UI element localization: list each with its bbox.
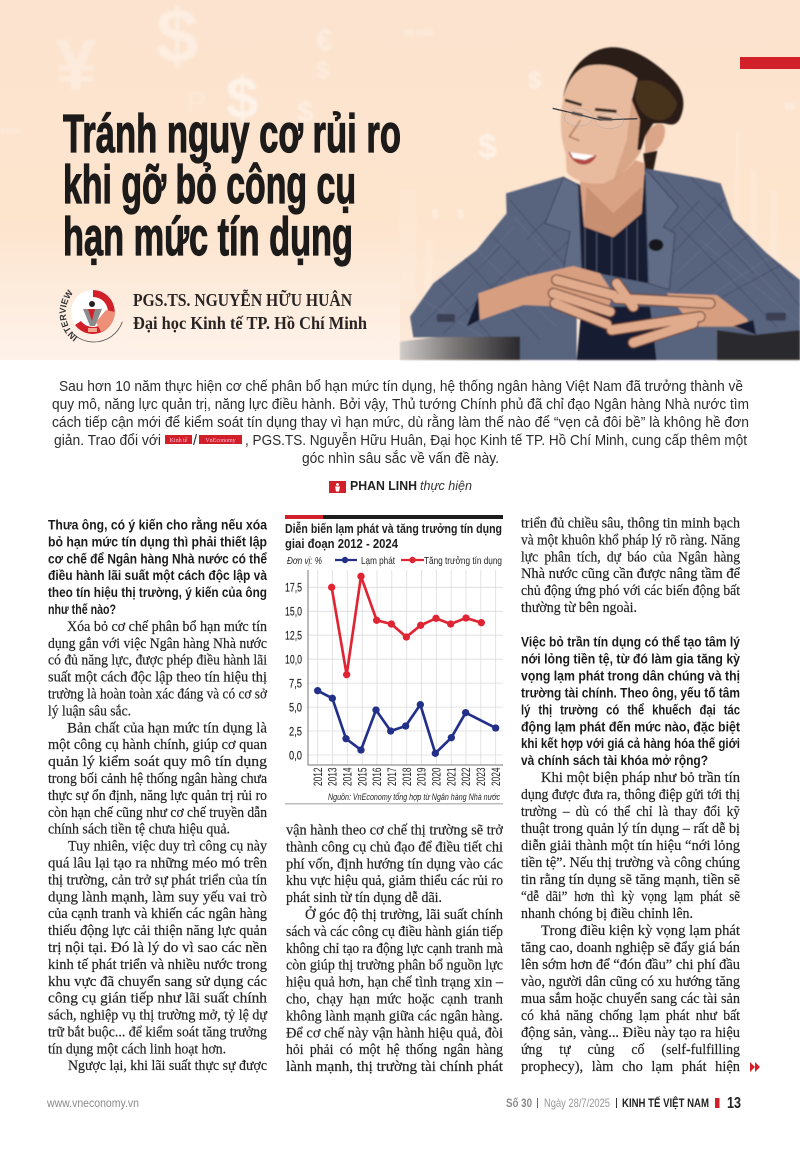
byline: PHAN LINH — [350, 478, 417, 493]
x axis year labels: 2021 — [444, 767, 458, 786]
column 2 article text: phát sinh từ tín dụng dễ dãi. — [286, 890, 442, 906]
answer paragraphs: Bản chất của hạn mức tín dụng là — [67, 720, 268, 736]
answer paragraphs: chính sách tiền tệ chưa hiệu quả. — [48, 822, 230, 838]
answer 2: ứng tự củng cố (self-fulfilling — [521, 1042, 740, 1058]
intro paragraph: / — [193, 433, 198, 449]
answer paragraphs: Ngược lại, khi lãi suất thực sự được — [68, 1058, 267, 1074]
answer paragraphs: của cạnh tranh và khiến các ngân hàng — [48, 906, 267, 922]
question 2: Việc bỏ trần tín dụng có thể tạo tâm lý — [521, 634, 740, 650]
answer paragraphs: Xóa bỏ cơ chế phân bổ hạn mức tín — [67, 619, 268, 635]
answer 2: tiền tệ”. Nếu thị trường và công chúng — [521, 855, 740, 871]
continued answer: lực phân tích, dự báo của Ngân hàng — [521, 549, 740, 565]
background currency symbols: $ — [316, 57, 330, 84]
headline: hạn mức tín dụng — [63, 207, 353, 267]
answer paragraphs: suất một cách độc lập theo tín hiệu thị — [48, 670, 267, 686]
x axis year labels: 2020 — [430, 767, 444, 786]
answer 2: tin rằng tín dụng sẽ tăng mạnh, tiền sẽ — [521, 872, 740, 888]
y axis labels: 5,0 — [289, 700, 302, 714]
column 2 article text: Ở góc độ thị trường, lãi suất chính — [305, 906, 504, 923]
question 2: nới lỏng tiền tệ, từ đó làm gia tăng kỳ — [521, 652, 740, 666]
intro paragraph: , PGS.TS. Nguyễn Hữu Huân, Đại học Kinh tế TP. Hồ Chí Minh, cung cấp thêm một — [245, 432, 747, 449]
background currency symbols: $ — [528, 67, 542, 94]
answer 2: thuật trong quản lý tín dụng – rất dễ bị — [521, 821, 740, 837]
answer 2: dụng được đưa ra, thông điệp gửi tới thị — [521, 787, 740, 803]
background currency symbols: P — [186, 86, 206, 119]
answer 2: trường – dù có thể chỉ là thay đổi kỹ — [521, 804, 741, 820]
question 2: trường tài chính. Theo ông, yếu tố tâm — [521, 685, 740, 700]
x axis year labels: 2019 — [415, 767, 429, 786]
answer paragraphs: còn hạn chế cũng như cơ chế truyền dẫn — [48, 805, 268, 821]
interviewee name and affiliation: Đại học Kinh tế TP. Hồ Chí Minh — [133, 313, 367, 333]
headline: khi gỡ bỏ công cụ — [63, 155, 356, 215]
continued answer: chủ động ứng phó với các biến động bất — [521, 583, 740, 599]
footer: 13 — [727, 1095, 741, 1112]
credit growth series — [328, 573, 485, 678]
footer: Số 30 — [506, 1096, 532, 1110]
answer 2: lên sớm hơn để “đón đầu” chi phí đầu — [521, 957, 740, 973]
question 2: lý thị trường có thể khuếch đại tác — [521, 702, 740, 717]
background currency symbols: 55 — [784, 102, 796, 113]
answer paragraphs: một công cụ hành chính, giúp cơ quan — [48, 737, 268, 753]
answer paragraphs: có đủ năng lực, được phép điều hành lãi — [48, 653, 267, 669]
chart title — [285, 521, 502, 551]
answer paragraphs: sách, nghiệp vụ thị trường mở, tỷ lệ dự — [48, 1008, 268, 1024]
column 2 article text: cho, chạy hạn mức hoặc cạnh tranh — [286, 992, 504, 1008]
column 2 article text: lành mạnh, thị trường tài chính phát — [286, 1059, 503, 1075]
question 1 — [48, 516, 267, 617]
x axis year labels: 2023 — [474, 767, 488, 786]
question 1: như thế nào? — [48, 602, 116, 617]
answer paragraphs: tín dụng một cách linh hoạt hơn. — [48, 1041, 226, 1057]
answer 2: prophecy), làm cho lạm phát hiện — [521, 1059, 741, 1075]
chart legend: Đơn vị: % — [287, 555, 322, 567]
background currency symbols: 85 H43 — [404, 28, 433, 38]
headline — [63, 104, 401, 267]
column 2 article text: không chỉ tạo ra động lực cạnh tranh mà — [286, 941, 504, 957]
hero banner — [0, 0, 800, 362]
answer 2: Trong điều kiện kỳ vọng lạm phát — [541, 923, 740, 939]
interviewee name and affiliation: PGS.TS. NGUYỄN HỮU HUÂN — [133, 289, 352, 310]
y axis labels — [285, 580, 302, 762]
answer paragraphs: trữ bắt buộc... để kiểm soát tăng trưởng — [48, 1024, 267, 1040]
y axis labels: 10,0 — [285, 652, 302, 666]
background currency symbols: ¥ — [56, 26, 96, 106]
column 1 article text — [48, 516, 268, 1074]
x axis year labels: 2013 — [326, 767, 340, 786]
background currency symbols: $ — [478, 128, 497, 166]
y axis labels: 12,5 — [285, 628, 302, 642]
byline — [329, 478, 472, 493]
chart source note: Nguồn: VnEconomy tổng hợp từ Ngân hàng Nhà nước — [328, 792, 500, 802]
answer 2: động sản, vàng... Điều này tạo ra hiệu — [521, 1025, 740, 1041]
column 2 article text: hỏi phải có một hệ thống ngân hàng — [286, 1042, 503, 1058]
y axis labels: 7,5 — [289, 676, 302, 690]
answer paragraphs: khu vực đã chuyển sang sử dụng các — [48, 974, 267, 990]
answer 2: tăng cao, doanh nghiệp sẽ đẩy giá bán — [521, 940, 741, 956]
continued answer — [521, 516, 741, 616]
answer paragraphs: dụng lành mạnh, làm suy yếu vai trò — [48, 889, 267, 905]
chart legend: Tăng trưởng tín dụng — [424, 555, 502, 567]
question 1: theo tín hiệu thị trường, ý kiến của ông — [48, 585, 267, 600]
masthead badge: Kinh tế: Kinh tế — [170, 437, 188, 444]
x axis year labels: 2014 — [340, 767, 354, 786]
question 1: cơ chế để Ngân hàng Nhà nước có thể — [48, 551, 267, 566]
background currency symbols: € — [316, 24, 333, 57]
answer paragraphs: lý luận sâu sắc. — [48, 703, 131, 719]
portrait of the interviewee — [400, 47, 800, 360]
masthead badge: VnEconomy — [199, 435, 242, 444]
answer paragraphs: thị trường, cản trở sự phát triển của tín — [48, 872, 268, 888]
column 2 article text: vận hành theo cơ chế thị trường sẽ trở — [286, 822, 503, 838]
y axis labels: 17,5 — [285, 580, 302, 594]
chart title: giai đoạn 2012 - 2024 — [285, 537, 398, 551]
masthead badge: Kinh tế — [165, 435, 192, 444]
column 2 article text: thành công cụ chủ đạo để điều tiết chi — [286, 839, 503, 855]
footer: Ngày 28/7/2025 — [544, 1096, 610, 1110]
answer paragraphs: trong bối cảnh hệ thống ngân hàng chưa — [48, 771, 268, 787]
background currency symbols: $ — [297, 96, 314, 129]
column 2 article text: phí vốn, định hướng tín dụng vào các — [286, 856, 503, 872]
background currency symbols — [0, 0, 796, 310]
continuation arrow — [750, 1062, 760, 1072]
question 2 — [521, 634, 740, 768]
column 3 article text — [521, 516, 741, 1075]
y axis labels: 15,0 — [285, 604, 302, 618]
answer 2: mua sắm hoặc chuyển sang các tài sản — [521, 991, 741, 1007]
line chart: inflation and credit growth — [285, 515, 503, 804]
answer paragraphs — [48, 619, 268, 1074]
intro paragraph: góc nhìn sâu sắc về vấn đề này. — [302, 450, 499, 467]
question 1: bỏ hạn mức tín dụng thì phải thiết lập — [48, 534, 267, 549]
answer paragraphs: thực sự ổn định, năng lực quản trị rủi ro — [48, 788, 267, 804]
x axis year labels: 2012 — [311, 767, 325, 786]
chart title: Diễn biến lạm phát và tăng trưởng tín dụng — [285, 521, 502, 536]
answer paragraphs: công cụ gián tiếp như lãi suất chính — [48, 991, 268, 1007]
question 1: Thưa ông, có ý kiến cho rằng nếu xóa — [48, 516, 267, 532]
background currency symbols: $ — [432, 207, 439, 221]
background currency symbols: $ — [226, 66, 258, 131]
answer paragraphs: quá lâu lại tạo ra những méo mó trên — [48, 856, 268, 872]
column 2 article text: Để cơ chế này vận hành hiệu quả, đòi — [286, 1025, 503, 1041]
y axis labels: 2,5 — [289, 724, 302, 738]
question 1: điều hành lãi suất một cách độc lập và — [48, 568, 267, 583]
masthead badge: VnEconomy: VnEconomy — [205, 438, 236, 444]
continued answer: thường từ bên ngoài. — [521, 600, 637, 616]
headline: Tránh nguy cơ rủi ro — [63, 104, 401, 164]
background currency symbols: 8394 — [0, 126, 20, 136]
question 2: động lạm phát đến mức nào, đặc biệt — [521, 719, 740, 734]
footer: www.vneconomy.vn — [46, 1096, 139, 1110]
column 2 article text: không lành mạnh giữa các ngân hàng. — [286, 1008, 503, 1024]
answer paragraphs: kinh tế phát triển và nhiều nước trong — [48, 957, 267, 973]
answer 2: có khả năng chống lạm phát như bất — [521, 1008, 740, 1024]
red accent bar — [740, 57, 800, 69]
interviewee name and affiliation — [133, 289, 367, 333]
answer 2: nhanh chóng bị điều chỉnh lên. — [521, 906, 693, 922]
x axis year labels: 2022 — [459, 767, 473, 786]
answer 2 — [521, 770, 741, 1075]
answer paragraphs: Tuy nhiên, việc duy trì công cụ này — [68, 839, 268, 855]
answer paragraphs: quản lý kiểm soát quy mô tín dụng — [48, 754, 267, 770]
answer 2: “dễ dãi” hơn thì kỳ vọng lạm phát sẽ — [521, 889, 740, 905]
answer paragraphs: trị nội tại. Đó là lý do vì sao các nền — [48, 940, 268, 956]
x axis year labels: 2024 — [489, 767, 503, 786]
chart grid — [308, 570, 503, 765]
question 2: vọng lạm phát trong dân chúng và thị — [521, 668, 740, 684]
intro paragraph: cách tiếp cận mới để kiểm soát tín dụng thay vì hạn mức, dù rằng làm thế nào để “vẹn cả đôi bề” là không hề đơn — [52, 414, 749, 431]
intro paragraph: giản. Trao đổi với — [54, 433, 161, 449]
x axis year labels: 2015 — [355, 767, 369, 786]
intro paragraph — [52, 379, 749, 467]
column 2 article text: sách và các công cụ điều hành gián tiếp — [286, 924, 503, 940]
inflation series — [314, 687, 499, 757]
column 2 article text — [286, 822, 504, 1075]
continued answer: triển đủ chiều sâu, thông tin minh bạch — [521, 516, 741, 532]
x axis year labels: 2018 — [400, 767, 414, 786]
answer 2: vào, người dân cũng có xu hướng tăng — [521, 974, 740, 990]
continued answer: và một khuôn khổ pháp lý rõ ràng. Năng — [521, 532, 740, 548]
answer paragraphs: thiếu động lực cải thiện năng lực quản — [48, 923, 268, 939]
x axis year labels — [311, 767, 503, 786]
interview logo: INTERVIEW — [59, 289, 78, 342]
chart legend — [287, 555, 502, 567]
answer paragraphs: trường là hoàn toàn xác đáng và có cơ sở — [48, 686, 267, 702]
interview logo — [59, 289, 123, 342]
question 2: khi kết hợp với giá cả hàng hóa thế giới — [521, 736, 740, 751]
intro paragraph: quy mô, năng lực quản trị, năng lực điều hành. Bởi vậy, Thủ tướng Chính phủ đã chỉ đạo Ngân hàng Nhà nước tìm — [52, 397, 749, 413]
x axis year labels: 2016 — [370, 767, 384, 786]
answer paragraphs: dụng gắn với việc Ngân hàng Nhà nước — [48, 636, 267, 652]
background currency symbols: $ — [457, 207, 464, 221]
column 2 article text: khu vực hiệu quả, giảm thiểu các rủi ro — [286, 873, 503, 889]
byline: thực hiện — [420, 478, 472, 493]
column 2 article text: còn giúp thị trường phân bổ nguồn lực — [286, 958, 503, 974]
answer 2: diễn giải thành một tín hiệu “nới lỏng — [521, 838, 740, 854]
x axis year labels: 2017 — [385, 767, 399, 786]
continued answer: Nhà nước cũng cần được nâng tầm để — [521, 566, 741, 582]
intro paragraph: Sau hơn 10 năm thực hiện cơ chế phân bổ hạn mức tín dụng, hệ thống ngân hàng Việt Nam đã trưởng thành về — [59, 379, 743, 395]
footer — [46, 1095, 741, 1112]
footer: KINH TẾ VIỆT NAM — [622, 1095, 709, 1110]
chart legend: Lạm phát — [361, 555, 395, 567]
question 2: và chính sách tài khóa mở rộng? — [521, 753, 708, 768]
answer 2: Khi một biện pháp như bỏ trần tín — [541, 770, 741, 786]
column 2 article text: hiệu quả hơn, hạn chế tình trạng xin – — [286, 975, 504, 991]
y axis labels: 0,0 — [289, 748, 302, 762]
